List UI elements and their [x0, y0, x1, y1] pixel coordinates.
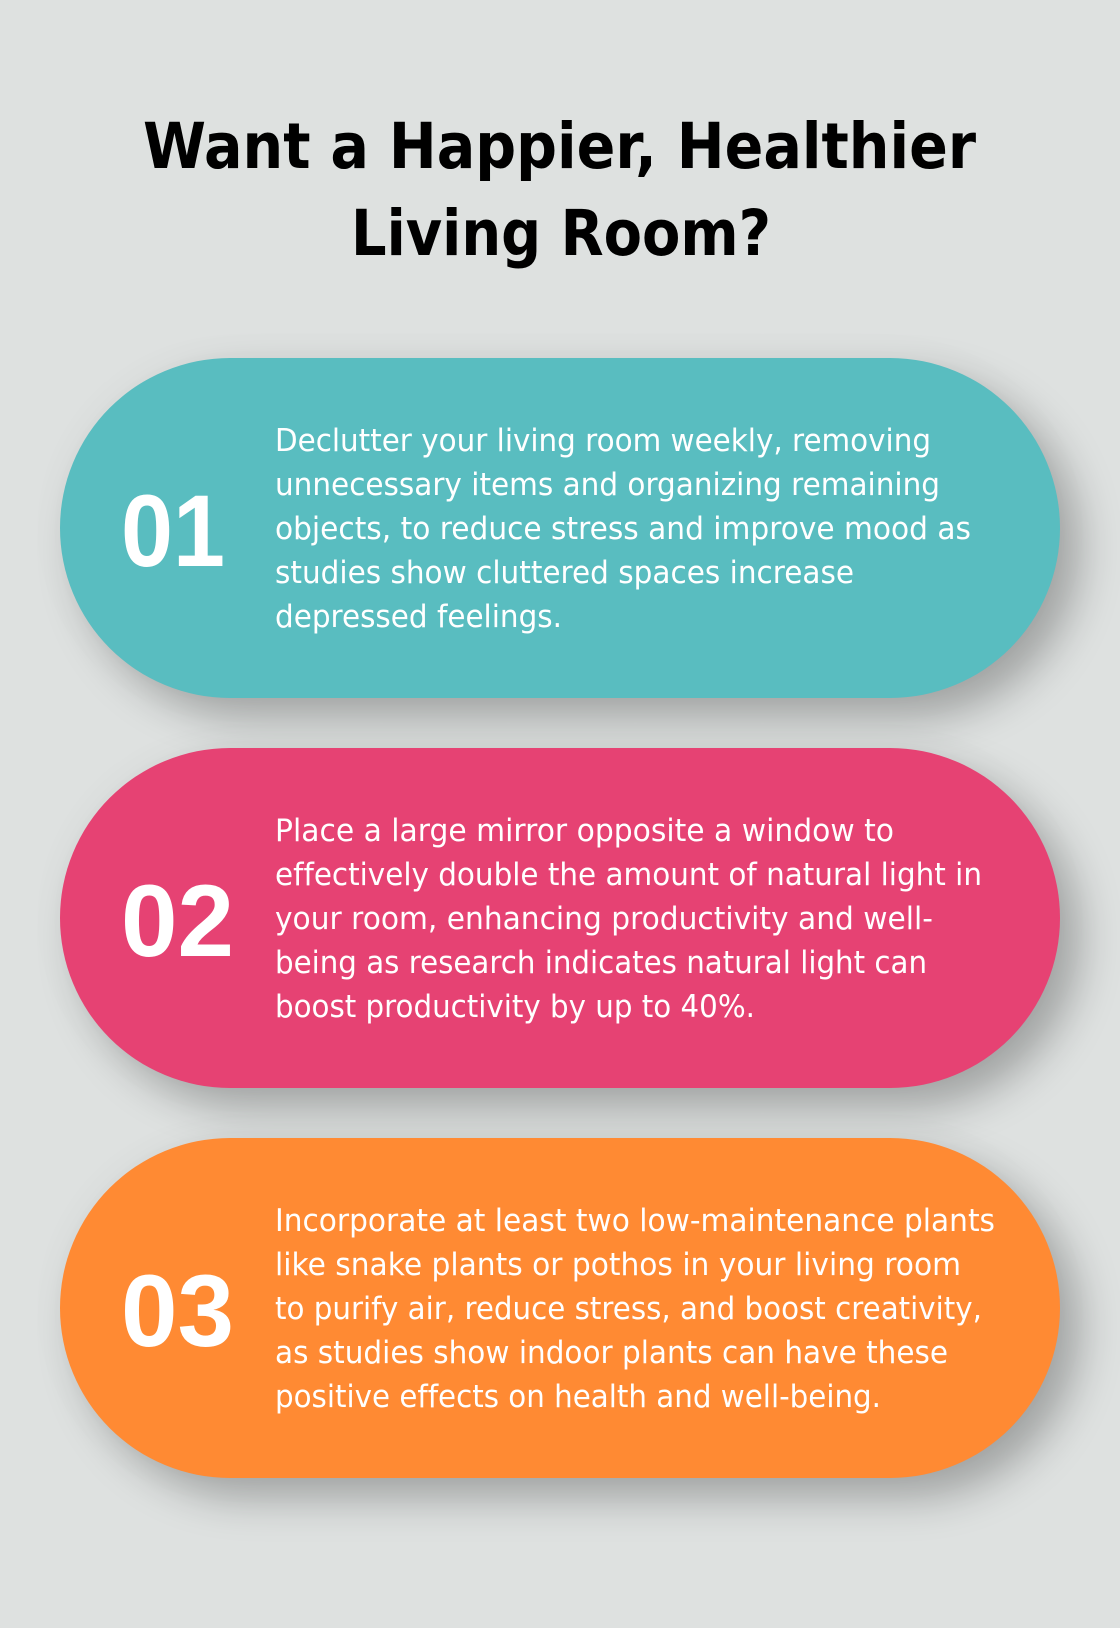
title — [143, 110, 976, 270]
step 01 text: unnecessary items and organizing remaining — [275, 467, 940, 503]
step number 02: 02 — [121, 864, 234, 978]
step 02 text: boost productivity by up to 40%. — [275, 989, 755, 1025]
step number 03: 03 — [121, 1254, 234, 1368]
step number 01: 01 — [121, 474, 225, 588]
title: Want a Happier, Healthier — [143, 110, 976, 183]
step 03 text: like snake plants or pothos in your living room — [275, 1247, 961, 1283]
step 02 text: effectively double the amount of natural light in — [275, 857, 982, 893]
step 01 text — [275, 423, 971, 635]
step 03 text: Incorporate at least two low-maintenance plants — [275, 1203, 995, 1239]
panel: step 03 — [60, 1138, 1060, 1478]
step 02 text: Place a large mirror opposite a window to — [275, 813, 894, 849]
step 03 text: to purify air, reduce stress, and boost creativity, — [275, 1291, 982, 1327]
step 01 text: depressed feelings. — [275, 599, 562, 635]
step 02 text: being as research indicates natural light can — [275, 945, 927, 981]
panel: step 01 — [60, 358, 1060, 698]
step 02 text — [275, 813, 982, 1025]
step 01 text: Declutter your living room weekly, removing — [275, 423, 931, 459]
panel: step 02 — [60, 748, 1060, 1088]
step 01 text: objects, to reduce stress and improve mood as — [275, 511, 971, 547]
step 03 text: as studies show indoor plants can have these — [275, 1335, 948, 1371]
step 03 text: positive effects on health and well-being. — [275, 1379, 881, 1415]
step 02 text: your room, enhancing productivity and well- — [275, 901, 933, 937]
title: Living Room? — [351, 197, 771, 270]
step 01 text: studies show cluttered spaces increase — [275, 555, 854, 591]
step 03 text — [275, 1203, 995, 1415]
